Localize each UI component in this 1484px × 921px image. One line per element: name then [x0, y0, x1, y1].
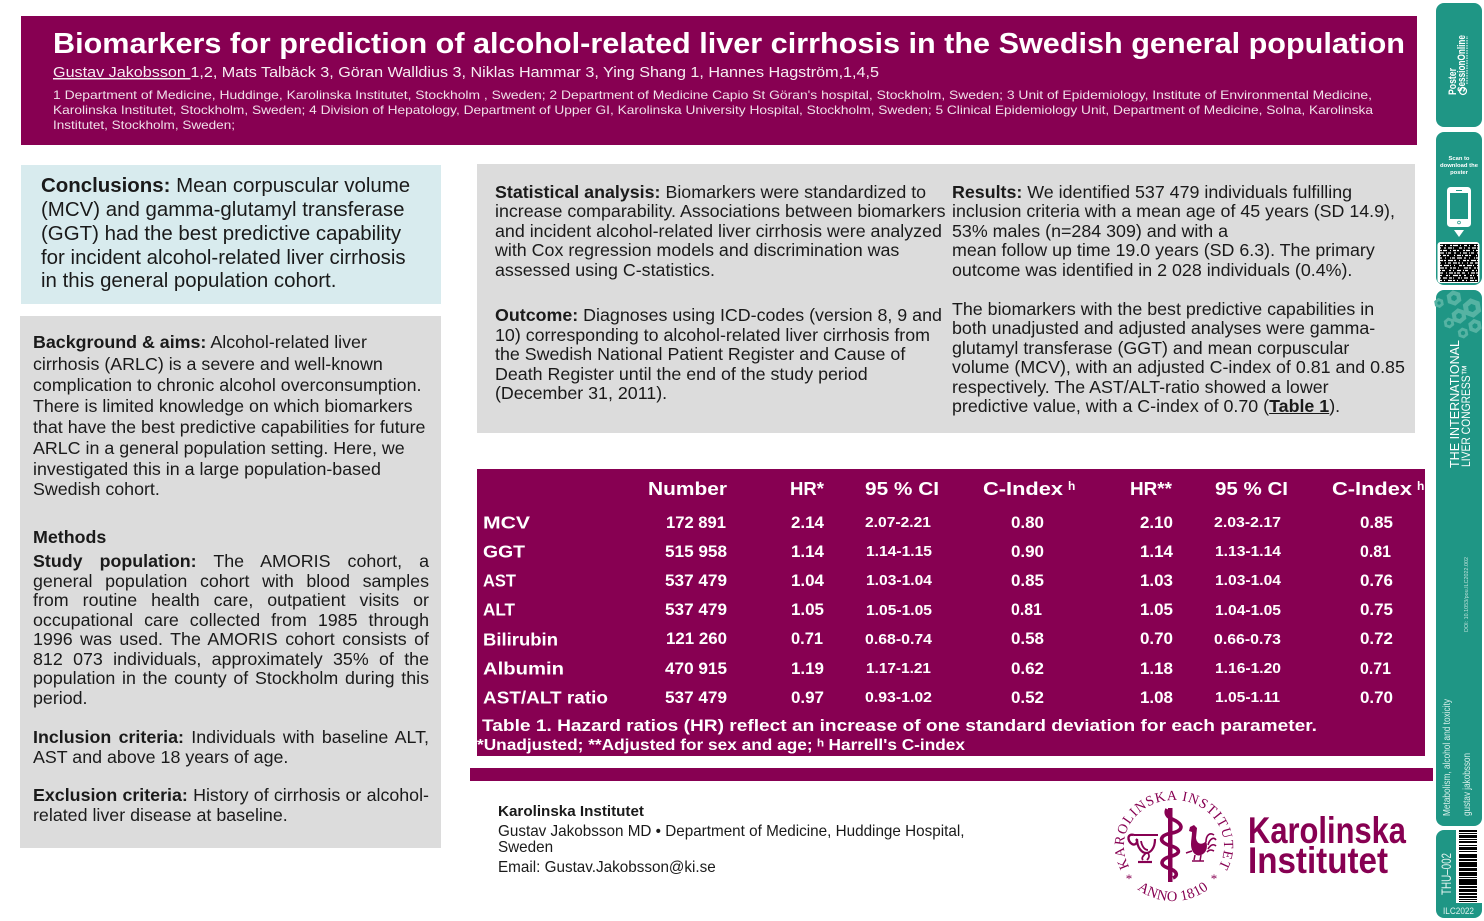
affiliations: Institutet, Stockholm, Sweden; — [53, 118, 235, 132]
biomarker results text: both unadjusted and adjusted analyses were gamma- — [952, 318, 1375, 338]
row: AST/ALT ratio: 1.08 — [1140, 689, 1173, 707]
seal rooster — [1186, 825, 1216, 861]
row: GGT: 1.14 — [791, 543, 825, 561]
row: GGT: 515 958 — [665, 543, 727, 561]
row: Bilirubin: 121 260 — [666, 630, 727, 648]
inclusion criteria text: AST and above 18 years of age. — [33, 747, 288, 767]
results text — [952, 182, 1395, 280]
conclusions text: (GGT) had the best predictive capability — [41, 222, 401, 245]
row: AST: 0.76 — [1360, 572, 1393, 590]
row: MCV: 0.80 — [1011, 514, 1044, 532]
row: AST — [483, 570, 1393, 590]
row: Bilirubin: 0.58 — [1011, 630, 1044, 648]
row: AST/ALT ratio: 0.93-1.02 — [865, 690, 932, 706]
affiliations: Karolinska Institutet, Stockholm, Sweden; 4 Division of Hepatology, Department of Upper GI, Karolinska University Hospital, Stockholm, Sweden; 5 Clinical Epidemiology Unit, Department of Medicine, Solna, Karolinska — [53, 103, 1373, 117]
row: Albumin: 1.17-1.21 — [866, 661, 931, 677]
row: Albumin: 1.18 — [1140, 660, 1173, 678]
table caption: *Unadjusted; **Adjusted for sex and age; ʰ Harrell's C-index — [477, 737, 965, 754]
study population text: period. — [33, 688, 88, 708]
methods heading: Methods — [33, 527, 106, 547]
row: MCV: 2.10 — [1140, 514, 1173, 532]
sidebar: congress tab — [1435, 290, 1482, 826]
row: AST: 1.03-1.04 — [866, 573, 932, 589]
row: AST: 1.04 — [791, 572, 825, 590]
poster number: THU–002 — [1439, 853, 1454, 895]
results text: Results: We identified 537 479 individuals fulfilling — [952, 182, 1352, 202]
row: Bilirubin: 0.72 — [1360, 630, 1393, 648]
conclusions text: (MCV) and gamma-glutamyl transferase — [41, 198, 404, 221]
row: MCV: 0.85 — [1360, 514, 1393, 532]
results text: 53% males (n=284 309) and with a — [952, 221, 1228, 241]
background and aims text: Background & aims: Alcohol-related liver — [33, 332, 367, 352]
conclusions text — [41, 174, 410, 292]
statistical analysis text: and incident alcohol-related liver cirrhosis were analyzed — [495, 221, 942, 241]
row: GGT: 0.81 — [1360, 543, 1391, 561]
row: GGT: 1.14-1.15 — [866, 544, 932, 560]
row: Albumin: 1.19 — [791, 660, 824, 678]
row: Albumin: 1.16-1.20 — [1215, 661, 1281, 677]
biomarker results text: respectively. The AST/ALT-ratio showed a lower — [952, 377, 1329, 397]
study population text: general population cohort with blood samples — [33, 571, 429, 591]
row: ALT — [483, 600, 1393, 620]
row: ALT: 1.04-1.05 — [1215, 603, 1281, 619]
table header row — [648, 478, 1424, 499]
outcome text: 10) corresponding to alcohol-related liver cirrhosis from — [495, 325, 930, 345]
row: Bilirubin: Bilirubin — [483, 630, 558, 650]
row: ALT: 1.05-1.05 — [866, 603, 932, 619]
study population text: 812 073 individuals, approximately 35% of the — [33, 649, 429, 669]
row: ALT: 1.05 — [791, 601, 824, 619]
outcome text: Outcome: Diagnoses using ICD-codes (version 8, 9 and — [495, 305, 942, 325]
panel: background and methods — [20, 316, 441, 848]
conclusions text: in this general population cohort. — [41, 269, 336, 292]
row: Bilirubin — [483, 630, 1393, 650]
seal staff and serpent — [1162, 808, 1181, 882]
row: AST/ALT ratio: 0.52 — [1011, 689, 1044, 707]
scan caption: poster — [1450, 170, 1469, 176]
row: Albumin — [483, 658, 1391, 678]
background and aims text: investigated this in a large population-based — [33, 459, 381, 479]
row: AST: 0.85 — [1011, 572, 1044, 590]
study population text: 1996 was used. The AMORIS cohort consists of — [33, 629, 429, 649]
contact block: Karolinska Institutet — [498, 803, 644, 820]
study population text: from routine health care, outpatient visits or — [33, 590, 429, 610]
row: AST: 1.03 — [1140, 572, 1173, 590]
session and author: gustav jakobsson — [1461, 753, 1473, 816]
session and author — [1441, 698, 1473, 816]
header banner — [21, 16, 1417, 145]
biomarker results text: volume (MCV), with an adjusted C-index of 0.81 and 0.85 — [952, 357, 1405, 377]
row: Bilirubin: 0.70 — [1140, 630, 1173, 648]
congress code: ILC2022 — [1443, 906, 1474, 916]
table header row: 95 % CI — [1215, 478, 1288, 499]
study population text: occupational care collected from 1985 through — [33, 610, 429, 630]
row: AST/ALT ratio — [483, 688, 1393, 708]
statistical analysis text: with Cox regression models and discrimination was — [495, 240, 899, 260]
row: AST: AST — [483, 570, 516, 590]
background and aims text: complication to chronic alcohol overconsumption. — [33, 375, 421, 395]
row: GGT: 1.13-1.14 — [1215, 544, 1281, 560]
congress name: LIVER CONGRESS™ — [1459, 365, 1473, 467]
row: ALT: 0.81 — [1011, 601, 1042, 619]
congress name — [1447, 340, 1473, 468]
statistical analysis text: assessed using C-statistics. — [495, 260, 715, 280]
exclusion criteria text: Exclusion criteria: History of cirrhosis or alcohol- — [33, 785, 429, 805]
background and aims text: cirrhosis (ARLC) is a severe and well-known — [33, 354, 383, 374]
row: GGT — [483, 542, 1391, 562]
wordmark: Institutet — [1248, 840, 1388, 881]
seal lettering: * — [1211, 871, 1217, 886]
exclusion criteria text — [33, 785, 429, 825]
row: AST/ALT ratio: 537 479 — [665, 689, 727, 707]
contact block: Email: Gustav.Jakobsson@ki.se — [498, 859, 716, 876]
row: MCV — [483, 512, 1393, 532]
row: Bilirubin: 0.66-0.73 — [1214, 632, 1281, 648]
row: AST: 537 479 — [665, 572, 727, 590]
table header row: h — [1068, 479, 1075, 493]
background and aims text: ARLC in a general population setting. Here, we — [33, 438, 405, 458]
biomarker results text: glutamyl transferase (GGT) and mean corpuscular — [952, 338, 1349, 358]
QR code — [1438, 242, 1480, 283]
row: ALT: 0.75 — [1360, 601, 1393, 619]
biomarker results text: predictive value, with a C-index of 0.70 (Table 1). — [952, 396, 1340, 416]
background and aims text — [33, 332, 425, 499]
outcome text — [495, 305, 942, 403]
row: Albumin: Albumin — [483, 658, 564, 678]
outcome text: Death Register until the end of the study period — [495, 364, 868, 384]
icon: down arrow — [1454, 230, 1464, 237]
panel: analysis and results — [477, 164, 1415, 433]
exclusion criteria text: related liver disease at baseline. — [33, 805, 288, 825]
statistical analysis text: Statistical analysis: Biomarkers were standardized to — [495, 182, 926, 202]
footer divider bar — [470, 768, 1433, 781]
study population text — [33, 551, 430, 708]
conclusions text: Conclusions: Mean corpuscular volume — [41, 174, 410, 197]
row: GGT: 1.14 — [1140, 543, 1174, 561]
table header row: Number — [648, 478, 727, 499]
row: MCV: 2.03-2.17 — [1214, 515, 1281, 531]
seal lettering: * — [1126, 871, 1132, 886]
row: MCV: MCV — [483, 512, 530, 532]
session and author: Metabolism, alcohol and toxicity — [1441, 698, 1453, 816]
conclusions text: for incident alcohol-related liver cirrhosis — [41, 246, 406, 269]
seal lettering: KAROLINSKA INSTITUTET — [1114, 790, 1234, 871]
row: AST/ALT ratio: AST/ALT ratio — [483, 688, 608, 708]
row: MCV: 2.07-2.21 — [865, 515, 931, 531]
inclusion criteria text — [33, 727, 429, 767]
row: Albumin: 0.62 — [1011, 660, 1044, 678]
statistical analysis text: increase comparability. Associations between biomarkers — [495, 201, 946, 221]
biomarker results text: The biomarkers with the best predictive capabilities in — [952, 299, 1374, 319]
study population text: Study population: The AMORIS cohort, a — [33, 551, 429, 571]
outcome text: the Swedish National Patient Register and Cause of — [495, 344, 905, 364]
row: Albumin: 470 915 — [665, 660, 727, 678]
sidebar: scan to download tab — [1436, 132, 1482, 285]
contact block — [498, 803, 964, 876]
scan caption: download the — [1440, 163, 1479, 169]
row: ALT: 537 479 — [665, 601, 727, 619]
scan caption: Scan to — [1449, 156, 1470, 162]
seal bowl — [1128, 835, 1158, 862]
results text: outcome was identified in 2 028 individuals (0.4%). — [952, 260, 1352, 280]
PosterSessionOnline wordmark: SessionOnline — [1456, 35, 1468, 92]
background and aims text: Swedish cohort. — [33, 479, 160, 499]
seal lettering: ANNO 1810 — [1137, 882, 1207, 902]
authors: Gustav Jakobsson 1,2, Mats Talbäck 3, Göran Walldius 3, Niklas Hammar 3, Ying Shang 1, Hannes Hagström,1,4,5 — [53, 64, 879, 81]
row: ALT: ALT — [483, 600, 515, 620]
sidebar: poster number tab — [1436, 830, 1482, 918]
background and aims text: that have the best predictive capabilities for future — [33, 417, 425, 437]
table caption — [477, 716, 1317, 754]
panel: conclusions — [21, 165, 441, 304]
barcode — [1459, 830, 1477, 902]
table header row: HR** — [1130, 478, 1173, 499]
row: Bilirubin: 0.68-0.74 — [865, 632, 932, 648]
affiliations: 1 Department of Medicine, Huddinge, Karolinska Institutet, Stockholm , Sweden; 2 Department of Medicine Capio St Göran's hospital, Stockholm, Sweden; 3 Unit of Epidemiology, Institute of Environmental Medicine, — [53, 88, 1372, 102]
wordmark: Karolinska — [1248, 810, 1406, 851]
row: AST/ALT ratio: 0.97 — [791, 689, 824, 707]
row: Bilirubin: 0.71 — [791, 630, 823, 648]
table header row: h — [1417, 479, 1424, 493]
table header row: C-Index — [983, 478, 1064, 499]
row: MCV: 172 891 — [666, 514, 726, 532]
row: AST: 1.03-1.04 — [1215, 573, 1281, 589]
row: GGT: 0.90 — [1011, 543, 1044, 561]
outcome text: (December 31, 2011). — [495, 383, 667, 403]
PosterSessionOnline wordmark — [1447, 35, 1468, 95]
poster title: Biomarkers for prediction of alcohol-related liver cirrhosis in the Swedish general population — [53, 28, 1405, 60]
table header row: HR* — [790, 478, 825, 499]
results text: mean follow up time 19.0 years (SD 6.3). The primary — [952, 240, 1375, 260]
wordmark — [1248, 810, 1406, 881]
row: ALT: 1.05 — [1140, 601, 1173, 619]
table caption: Table 1. Hazard ratios (HR) reflect an increase of one standard deviation for each parameter. — [482, 716, 1317, 735]
hexagon pattern — [1435, 292, 1481, 338]
inclusion criteria text: Inclusion criteria: Individuals with baseline ALT, — [33, 727, 429, 747]
results text: inclusion criteria with a mean age of 45 years (SD 14.9), — [952, 201, 1395, 221]
background and aims text: There is limited knowledge on which biomarkers — [33, 396, 413, 416]
contact block: Sweden — [498, 839, 553, 856]
DOI: DOI: 10.1053/pou.ILC2022.002 — [1464, 557, 1470, 632]
row: GGT: GGT — [483, 542, 525, 562]
row: Albumin: 0.71 — [1360, 660, 1391, 678]
congress name: THE INTERNATIONAL — [1447, 340, 1462, 468]
icon: phone — [1447, 187, 1471, 227]
statistical analysis text — [495, 182, 946, 280]
affiliations — [53, 88, 1373, 132]
biomarker results text — [952, 299, 1405, 416]
scan caption — [1440, 156, 1479, 176]
row: AST/ALT ratio: 1.05-1.11 — [1215, 690, 1280, 706]
row: AST/ALT ratio: 0.70 — [1360, 689, 1393, 707]
contact block: Gustav Jakobsson MD • Department of Medicine, Huddinge Hospital, — [498, 823, 964, 840]
table header row: C-Index — [1332, 478, 1413, 499]
study population text: population in the county of Stockholm during this — [33, 668, 429, 688]
table header row: 95 % CI — [865, 478, 939, 499]
PosterSessionOnline wordmark: Poster — [1447, 67, 1459, 95]
row: MCV: 2.14 — [791, 514, 825, 532]
